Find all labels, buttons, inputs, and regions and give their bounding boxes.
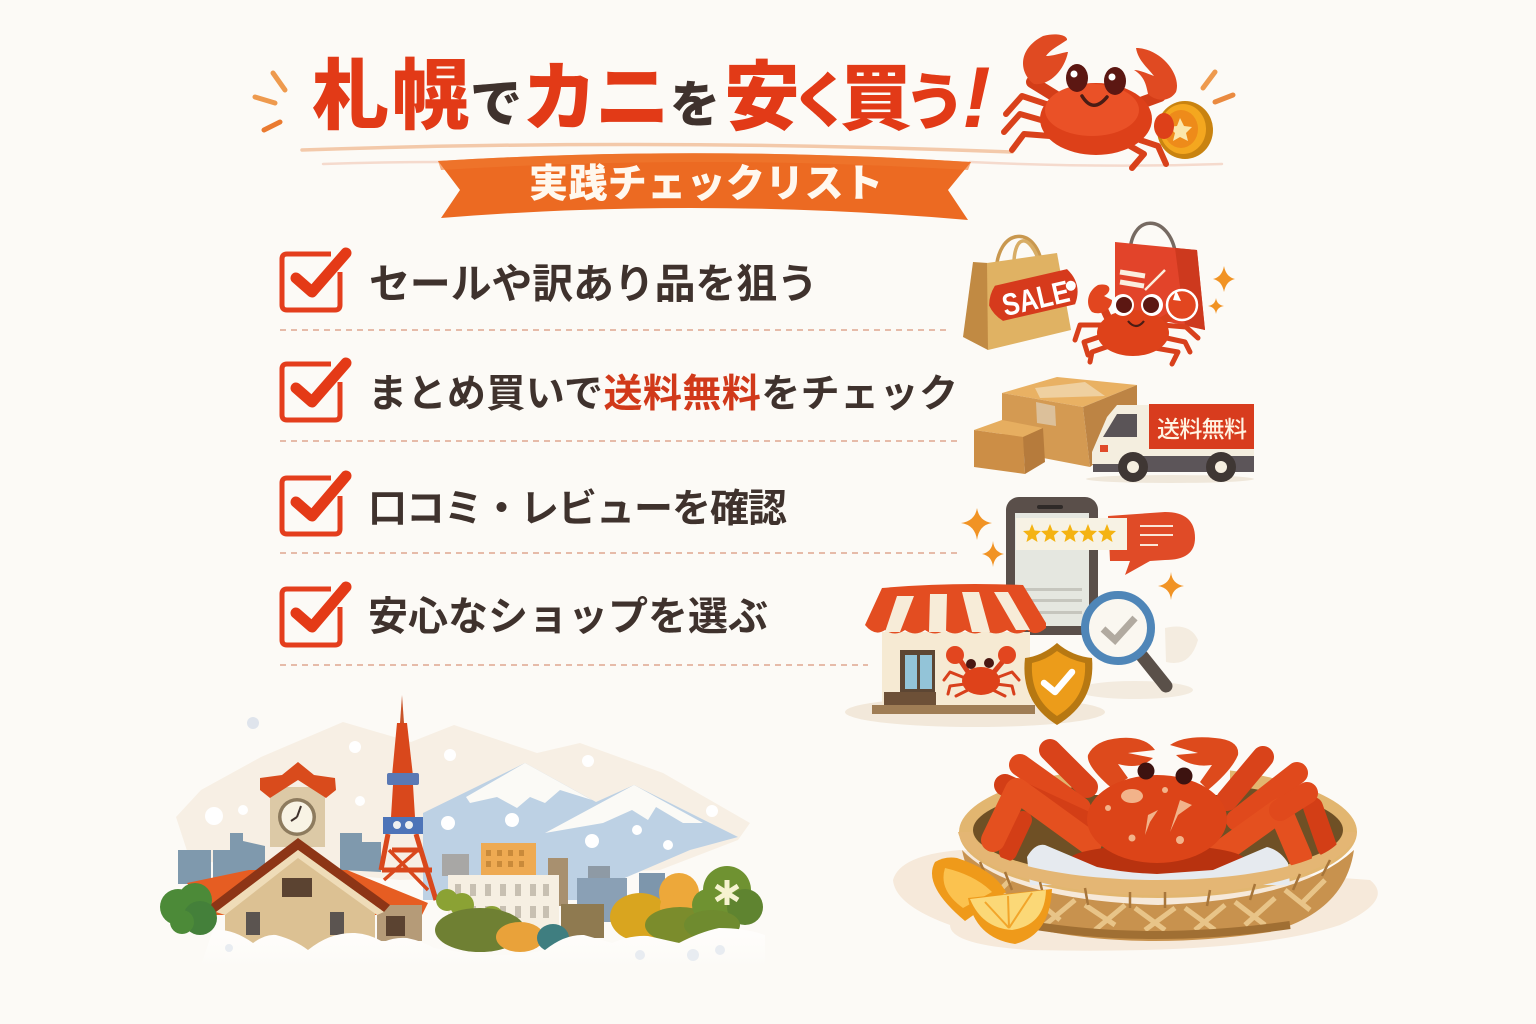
illustration: reviews, shop, shield and magnifier	[845, 497, 1198, 727]
title: 札	[312, 54, 389, 140]
smartphone	[1006, 497, 1098, 635]
illustration: sale bags and crab	[963, 223, 1235, 364]
title: カ	[522, 56, 597, 140]
illustration: Sapporo townscape	[160, 695, 765, 968]
sparkle ticks: left of title	[255, 73, 285, 130]
checklist item 2: まとめ買いで送料無料をチェック	[368, 373, 958, 416]
crab body	[1069, 762, 1245, 875]
checklist item 1: セールや訳あり品を狙う	[369, 261, 818, 307]
title: く	[791, 68, 851, 135]
shield with check	[1024, 643, 1092, 725]
mascot crab with coin	[1004, 34, 1213, 168]
checkbox icon 3	[282, 476, 346, 534]
crab on shop wall	[944, 646, 1019, 696]
tan shopping bag	[963, 236, 1071, 350]
title: 幌	[392, 54, 469, 140]
beige distant mountains	[176, 722, 750, 880]
checklist item 3	[282, 476, 787, 534]
crab claws	[1088, 737, 1238, 790]
salt	[1027, 845, 1290, 885]
trees and shrubs	[160, 866, 763, 952]
title	[312, 50, 991, 146]
sparkle ticks: right of title	[1203, 72, 1233, 102]
sparkles	[961, 508, 1184, 600]
checklist item 4: 安心なショップを選ぶ	[368, 595, 768, 639]
red shopping bag	[1115, 223, 1205, 330]
title: う	[904, 69, 966, 138]
basket shadow	[893, 850, 1378, 951]
snow ground	[200, 928, 765, 968]
sale tag: SALE	[999, 274, 1073, 323]
falling snowflakes	[205, 717, 725, 961]
title: ニ	[595, 56, 670, 140]
orange wedges	[932, 858, 1052, 944]
checklist item 3: 口コミ・レビューを確認	[368, 488, 787, 531]
magnifying glass with check	[1085, 595, 1166, 686]
title: 買	[840, 60, 912, 140]
snow-capped blue mountains	[423, 763, 738, 900]
sparkles	[1208, 266, 1235, 314]
clock tower hall building	[187, 838, 428, 950]
speech bubble	[1108, 512, 1195, 575]
delivery truck	[1092, 404, 1254, 482]
clock tower	[260, 762, 336, 847]
checklist item 2	[282, 363, 958, 420]
small crab with bags	[1075, 284, 1198, 364]
basket interior	[959, 766, 1357, 898]
crab legs	[993, 750, 1327, 857]
checklist item 1	[282, 253, 818, 310]
subtitle ribbon: 実践チェックリスト	[529, 163, 883, 206]
background blue buildings	[178, 833, 381, 884]
checkbox icon 4	[282, 587, 346, 645]
illustration: king crab in bamboo basket	[893, 737, 1378, 951]
title underline swooshes	[302, 144, 1222, 166]
title: !	[962, 50, 991, 146]
title: を	[670, 77, 720, 133]
checkbox icon 2	[282, 363, 346, 420]
delivery truck: 送料無料	[1157, 416, 1247, 442]
Sapporo TV tower	[381, 695, 436, 900]
basket front rim	[958, 832, 1357, 908]
basket body and weave	[962, 850, 1354, 941]
five-star rating card	[1016, 518, 1127, 550]
subtitle ribbon	[438, 153, 971, 220]
shop building	[865, 584, 1046, 714]
illustration: boxes and delivery truck	[974, 377, 1254, 483]
title: 安	[724, 56, 800, 141]
title: で	[470, 76, 522, 134]
city buildings	[442, 843, 665, 938]
checkbox icon 1	[282, 253, 346, 310]
checklist item 4	[282, 587, 768, 645]
cardboard boxes	[974, 377, 1137, 474]
